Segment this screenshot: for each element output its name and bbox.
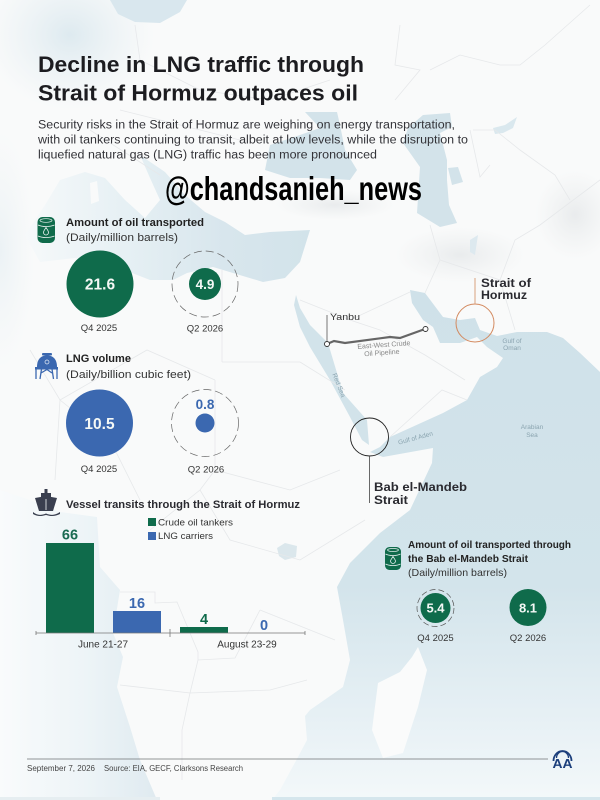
map: sea labels: Oman: [503, 345, 521, 352]
map: East-West pipeline: Oil Pipeline: [364, 349, 400, 358]
title: [38, 52, 364, 106]
unit: LNG: (Daily/billion cubic feet): [66, 369, 191, 381]
legend: Crude oil tankers: [158, 518, 233, 528]
heading: Bab el-Mandeb oil: the Bab el-Mandeb Strait: [408, 553, 528, 565]
footer date: September 7, 2026: [27, 764, 96, 773]
intro text: with oil tankers continuing to transit, albeit at low levels, while the disruption to: [37, 134, 468, 146]
circle: oil Q4 2025: 21.6: [85, 276, 115, 294]
legend: LNG carriers: [158, 531, 213, 542]
circle: oil Q2 2026: [172, 251, 238, 334]
map: sea labels: Sea: [526, 432, 538, 439]
heading: Bab el-Mandeb oil: [408, 539, 571, 565]
map: Strait of Hormuz marker: [456, 278, 531, 342]
circle: oil Q4 2025: [66, 250, 134, 334]
bar chart: June 21-27: [78, 640, 128, 650]
map: sea labels: Gulf of: [502, 338, 522, 345]
map: Strait of Hormuz marker: Strait of: [481, 278, 531, 290]
legend: [148, 518, 233, 542]
circle: Bab Q2 2026: Q2 2026: [510, 633, 546, 644]
circle: Bab Q2 2026: 8.1: [519, 600, 537, 616]
bar chart: 16: [129, 596, 145, 612]
circle: LNG Q4 2025: Q4 2025: [81, 464, 117, 475]
bar chart: 66: [62, 528, 78, 544]
map: sea labels: Red Sea: [330, 372, 347, 399]
logo: AA: AA: [552, 756, 573, 771]
map: East-West pipeline: East-West Crude: [357, 340, 411, 351]
unit: Bab el-Mandeb oil: (Daily/million barrels): [408, 567, 507, 579]
circle: LNG Q4 2025: 10.5: [84, 416, 115, 433]
panel: vessel transits: [33, 489, 305, 650]
map: Bab el-Mandeb marker: [350, 418, 467, 507]
bar chart: 0: [260, 618, 268, 634]
bar chart: [36, 528, 305, 650]
intro text: [37, 120, 468, 162]
panel: oil transported: [38, 217, 238, 334]
circle: LNG Q2 2026: 0.8: [196, 397, 215, 412]
unit: oil: (Daily/million barrels): [66, 232, 178, 244]
logo: AA: [552, 751, 573, 771]
map: Bab el-Mandeb marker: Bab el-Mandeb: [374, 482, 467, 494]
intro text: Security risks in the Strait of Hormuz are weighing on energy transportation,: [38, 120, 455, 132]
intro text: liquefied natural gas (LNG) traffic has been more pronounced: [38, 150, 377, 162]
map: sea labels: [330, 338, 544, 447]
map: sea labels: Arabian: [521, 424, 544, 431]
icon: oil barrel: [38, 217, 55, 243]
map: East-West pipeline: [324, 312, 428, 358]
circle: LNG Q2 2026: Q2 2026: [188, 464, 224, 476]
heading: Bab el-Mandeb oil: Amount of oil transported through: [408, 539, 571, 551]
bar chart: 4: [200, 612, 208, 628]
heading: LNG: LNG volume: [66, 353, 131, 365]
watermark: @chandsanieh_news: [165, 170, 422, 207]
icon: LNG tank: [35, 353, 58, 379]
circle: LNG Q4 2025: [66, 390, 133, 475]
circle: oil Q4 2025: Q4 2025: [81, 323, 117, 334]
map: East-West pipeline: Yanbu: [330, 312, 360, 323]
circle: oil Q2 2026: 4.9: [196, 277, 214, 292]
map: Strait of Hormuz marker: Hormuz: [481, 290, 527, 302]
circle: LNG Q2 2026: [172, 390, 238, 476]
bar chart: August 23-29: [217, 640, 277, 650]
heading: vessel transits: Vessel transits through the Strait of Hormuz: [66, 499, 300, 511]
map: Bab el-Mandeb marker: Strait: [374, 495, 408, 507]
footer source: Source: EIA, GECF, Clarksons Research: [104, 764, 243, 773]
title: Decline in LNG traffic through: [38, 52, 364, 77]
circle: Bab Q2 2026: [510, 589, 546, 644]
map: sea labels: Gulf of Aden: [397, 430, 434, 447]
panel: Bab el-Mandeb oil: [385, 539, 571, 644]
circle: oil Q2 2026: Q2 2026: [187, 324, 223, 334]
icon: ship: [33, 489, 60, 516]
icon: oil barrel: [385, 547, 401, 570]
footer: [27, 751, 573, 773]
heading: oil: Amount of oil transported: [66, 217, 204, 229]
title: Strait of Hormuz outpaces oil: [38, 80, 358, 106]
panel: LNG volume: [35, 353, 238, 476]
circle: Bab Q4 2025: [417, 590, 454, 644]
circle: Bab Q4 2025: Q4 2025: [417, 633, 454, 644]
circle: Bab Q4 2025: 5.4: [426, 600, 445, 616]
